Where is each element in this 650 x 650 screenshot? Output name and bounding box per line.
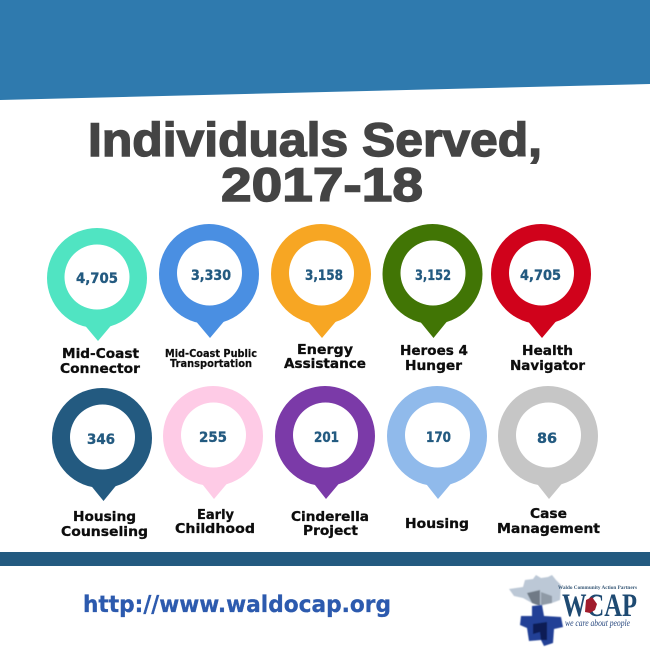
pin: Housing <box>387 386 487 532</box>
header banner <box>0 0 650 100</box>
pin: Health Navigator <box>491 224 591 374</box>
pin: Mid-Coast Public Transportation: Mid-Coast Public <box>165 348 257 360</box>
pin: Housing: 170 <box>426 430 451 446</box>
pin: Case Management: Management <box>497 521 601 537</box>
pin: Cinderella Project <box>275 386 375 539</box>
pin: Housing Counseling: Counseling <box>61 524 148 540</box>
pin: Cinderella Project: Cinderella <box>291 509 369 525</box>
pin: Housing Counseling: Housing <box>73 509 136 525</box>
icon: grey puzzle pieces <box>509 575 561 606</box>
title: Individuals Served, <box>88 113 542 166</box>
pin: Energy Assistance: 3,158 <box>305 268 343 284</box>
pin: Mid-Coast Connector: Connector <box>60 361 140 377</box>
pin: Housing Counseling <box>52 388 152 540</box>
title <box>88 113 542 211</box>
pin: Mid-Coast Connector: 4,705 <box>76 271 118 287</box>
pin: Energy Assistance: Assistance <box>284 356 366 372</box>
icon: blue puzzle piece <box>520 605 563 646</box>
title: 2017-18 <box>221 158 423 211</box>
icon: Maine map <box>585 597 597 613</box>
pin: Case Management: Case <box>530 506 567 522</box>
pin: Early Childhood: Early <box>197 507 234 523</box>
pin: Health Navigator: Navigator <box>510 358 585 374</box>
pin: Mid-Coast Connector <box>47 228 147 377</box>
logo: WCAP <box>509 575 637 646</box>
pin: Early Childhood: 255 <box>199 430 227 446</box>
pin: Early Childhood <box>163 386 263 537</box>
pin: Heroes 4 Hunger: Heroes 4 <box>400 343 468 359</box>
pin: Heroes 4 Hunger: 3,152 <box>415 268 451 284</box>
pin: Health Navigator: Health <box>522 343 573 359</box>
pin: Case Management: 86 <box>537 431 557 447</box>
footer bar <box>0 552 650 566</box>
pin: Housing Counseling: 346 <box>87 432 115 448</box>
pin: Mid-Coast Connector: Mid-Coast <box>62 346 140 362</box>
pin: Mid-Coast Public Transportation <box>159 224 259 370</box>
pin: Heroes 4 Hunger: Hunger <box>405 358 462 374</box>
pin: Case Management <box>497 386 601 537</box>
pin: Health Navigator: 4,705 <box>520 268 561 284</box>
pin: Energy Assistance <box>271 224 371 372</box>
pin: Heroes 4 Hunger <box>382 224 482 374</box>
pin: Mid-Coast Public Transportation: Transportation <box>170 358 252 370</box>
logo tagline: we care about people <box>565 618 630 628</box>
pin: Early Childhood: Childhood <box>175 521 255 537</box>
pin: Mid-Coast Public Transportation: 3,330 <box>191 268 231 284</box>
website url: http://www.waldocap.org <box>83 592 391 618</box>
pin: Energy Assistance: Energy <box>297 342 353 358</box>
logo org name: Waldo Community Action Partners <box>558 586 637 591</box>
pin: Cinderella Project: Project <box>303 523 359 539</box>
pin: Housing: Housing <box>405 516 469 532</box>
pin: Cinderella Project: 201 <box>314 430 339 446</box>
